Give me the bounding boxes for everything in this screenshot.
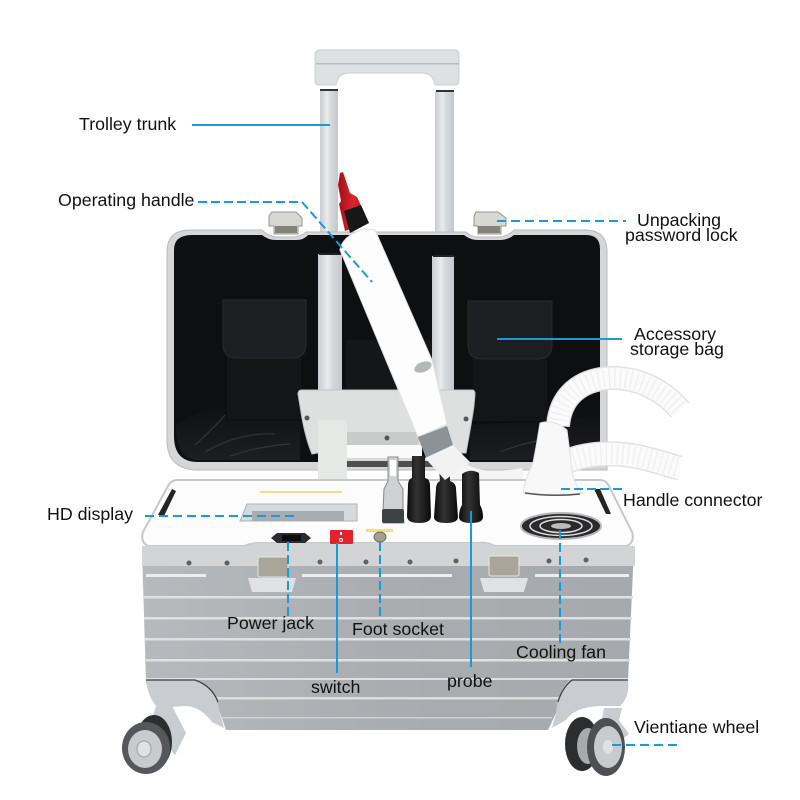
label: Accessory storage bag: Accessory <box>634 324 716 344</box>
open lid with black lining <box>167 230 607 470</box>
wheel: right caster <box>565 708 629 776</box>
cable hose <box>452 378 680 481</box>
foot socket <box>366 529 393 542</box>
handle rest bracket <box>298 390 475 482</box>
lid lock left <box>269 212 302 234</box>
lower trolley poles <box>318 253 454 396</box>
HD display <box>240 504 357 521</box>
lining wrinkles <box>195 415 560 456</box>
label: Vientiane wheel: Vientiane wheel <box>634 717 759 737</box>
label: probe: probe <box>447 671 493 691</box>
rivets <box>186 558 588 566</box>
label: switch: switch <box>311 677 360 697</box>
label: Accessory storage bag: storage bag <box>630 339 724 359</box>
storage pockets <box>223 300 552 422</box>
case latch right <box>480 556 528 592</box>
label: Unpacking password lock: password lock <box>625 225 738 245</box>
case body <box>142 543 635 730</box>
label: Trolley trunk: Trolley trunk <box>79 114 176 134</box>
label: Handle connector: Handle connector <box>623 490 762 510</box>
label: Cooling fan: Cooling fan <box>516 642 606 662</box>
rocker switch <box>330 530 353 544</box>
label: Operating handle: Operating handle <box>58 190 195 210</box>
wheel: left caster <box>122 706 186 774</box>
leader lines <box>145 125 680 745</box>
handle connector <box>523 422 583 495</box>
label: Unpacking password lock: Unpacking <box>637 210 721 230</box>
operating handpiece <box>338 172 470 480</box>
trolley handle <box>315 50 459 256</box>
cooling fan <box>521 513 601 539</box>
probe tips <box>382 456 483 523</box>
label: Power jack: Power jack <box>227 613 314 633</box>
base top panel <box>142 480 633 546</box>
label: Foot socket: Foot socket <box>352 619 444 639</box>
label: Unpacking password lock <box>625 210 738 245</box>
label: HD display: HD display <box>47 504 133 524</box>
case latch left <box>248 557 296 592</box>
power jack <box>271 533 311 543</box>
label: Accessory storage bag <box>630 324 724 359</box>
lid lock right <box>474 212 506 234</box>
